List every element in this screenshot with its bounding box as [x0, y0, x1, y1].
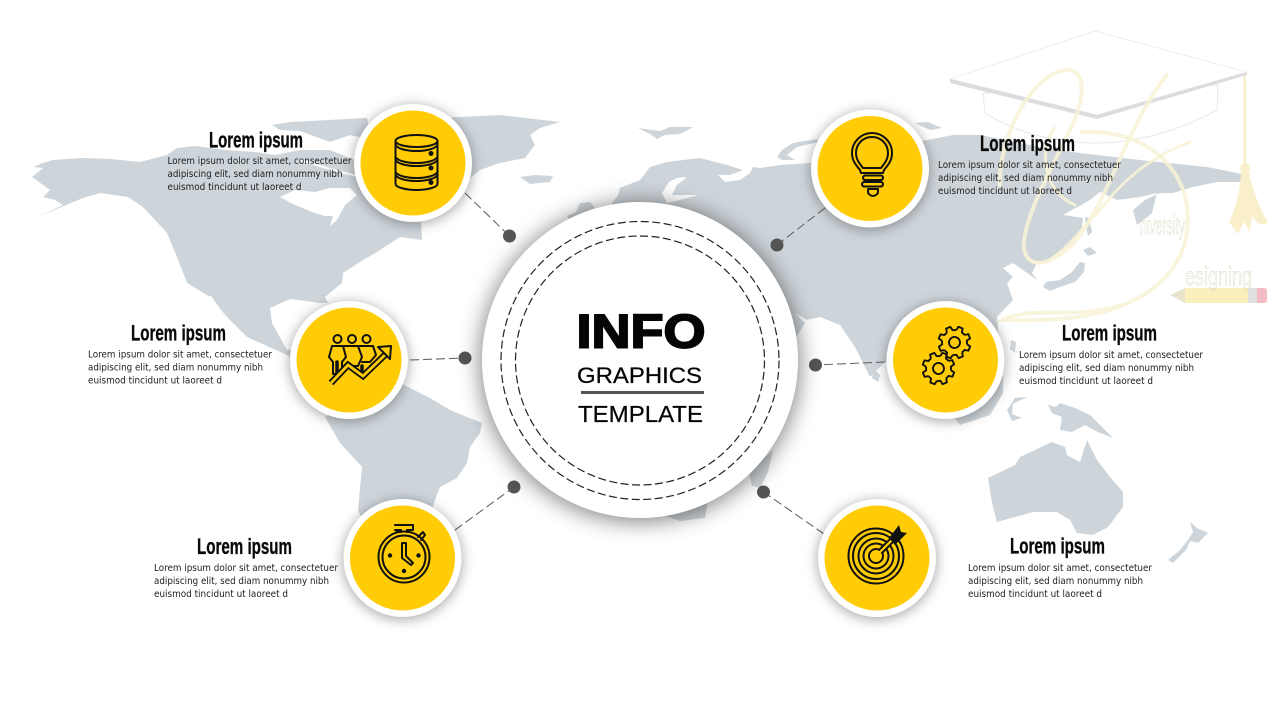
- title: GRAPHICS: GRAPHICS: [577, 363, 702, 388]
- Greenland: [400, 115, 560, 182]
- label: stopwatch: [154, 534, 338, 600]
- central badge: [480, 202, 800, 522]
- connector: target: [757, 486, 824, 534]
- Svalbard: [638, 127, 693, 139]
- Novaya Zemlya: [777, 139, 818, 160]
- South America: [325, 383, 482, 560]
- Hudson Bay: [280, 188, 357, 226]
- label: database: Lorem ipsum: [209, 128, 303, 152]
- title rule: [581, 391, 704, 394]
- connector: gears: [809, 358, 885, 372]
- cap edge: [950, 72, 1247, 119]
- label: light bulb: Lorem ipsum dolor sit amet, consectetuer: [938, 160, 1121, 171]
- icon: target with arrow: [848, 525, 907, 584]
- Sri Lanka: [872, 368, 880, 382]
- Taiwan: [1010, 340, 1016, 353]
- node: stopwatch: [342, 499, 462, 620]
- label: stopwatch: adipiscing elit, sed diam nonummy nibh: [154, 576, 329, 587]
- cap base: [983, 85, 1218, 143]
- label: people growth: euismod tincidunt ut laoreet d: [88, 376, 222, 386]
- label: people growth: Lorem ipsum dolor sit amet, consectetuer: [88, 350, 272, 360]
- label: people growth: Lorem ipsum: [131, 320, 226, 346]
- label: database: Lorem ipsum dolor sit amet, consectetuer: [168, 156, 352, 167]
- Severnaya Zemlya: [915, 122, 942, 130]
- label: target: [968, 534, 1152, 600]
- connector: database: [465, 193, 516, 242]
- tassel: [1229, 76, 1268, 234]
- node: people growth: [289, 301, 409, 422]
- label: light bulb: Lorem ipsum: [980, 131, 1075, 156]
- label: gears: [1019, 320, 1203, 387]
- connector: bulb: [770, 208, 825, 252]
- node: database: [353, 104, 473, 225]
- node: target: [817, 499, 937, 620]
- watermark words: niversity: [1140, 210, 1185, 240]
- Arctic channels: [270, 140, 358, 176]
- label: people growth: adipiscing elit, sed diam nonummy nibh: [88, 362, 263, 374]
- watermark words: esigning: [1185, 261, 1252, 291]
- label: database: adipiscing elit, sed diam nonummy nibh: [168, 169, 342, 180]
- icon: people with rising arrow: [329, 335, 391, 383]
- watermark words: [1140, 210, 1252, 291]
- pencil: [1170, 288, 1267, 303]
- icon: gears: [918, 322, 975, 389]
- label: gears: adipiscing elit, sed diam nonummy nibh: [1019, 363, 1194, 374]
- signature strokes: [1000, 70, 1190, 320]
- UK: [567, 202, 595, 220]
- Hokkaido: [1083, 247, 1097, 256]
- Africa tip: [660, 500, 708, 521]
- label: gears: euismod tincidunt ut laoreet d: [1019, 376, 1153, 387]
- Baja channel: [210, 296, 227, 321]
- label: stopwatch: Lorem ipsum dolor sit amet, consectetuer: [154, 563, 338, 574]
- node: light bulb: [810, 110, 930, 230]
- cap top: [950, 31, 1247, 115]
- North America: [32, 146, 422, 400]
- label: database: [168, 128, 352, 193]
- New Zealand: [1168, 522, 1208, 563]
- label: gears: Lorem ipsum: [1062, 320, 1157, 346]
- Japan: [1043, 262, 1085, 291]
- title: TEMPLATE: TEMPLATE: [578, 401, 703, 427]
- Eurasia: [600, 135, 1247, 425]
- Arctic islands: [272, 118, 372, 142]
- Sakhalin: [1085, 217, 1092, 236]
- icon: database: [396, 135, 438, 190]
- Australia: [988, 440, 1123, 535]
- Iceland: [520, 175, 553, 184]
- connector: people: [410, 352, 472, 364]
- label: target: Lorem ipsum: [1010, 534, 1105, 558]
- icon: light bulb: [852, 133, 892, 196]
- label: target: euismod tincidunt ut laoreet d: [968, 589, 1102, 600]
- Madagascar: [749, 450, 773, 488]
- label: stopwatch: euismod tincidunt ut laoreet d: [154, 589, 288, 600]
- label: gears: Lorem ipsum dolor sit amet, consectetuer: [1019, 350, 1203, 361]
- node: gears: [886, 301, 1006, 422]
- New Guinea: [1048, 403, 1113, 438]
- label: target: adipiscing elit, sed diam nonummy nibh: [968, 576, 1143, 587]
- label: light bulb: adipiscing elit, sed diam nonummy nibh: [938, 173, 1113, 184]
- title: INFO: INFO: [576, 306, 706, 358]
- connector: stopwatch: [455, 480, 520, 530]
- label: stopwatch: Lorem ipsum: [197, 534, 292, 559]
- label: target: Lorem ipsum dolor sit amet, consectetuer: [968, 563, 1152, 574]
- Philippines and Indonesia: [1007, 397, 1027, 421]
- world map background: [32, 115, 1247, 563]
- label: light bulb: euismod tincidunt ut laoreet d: [938, 186, 1072, 197]
- watermark: graduation cap and signature: [950, 31, 1268, 320]
- Baltic: [662, 177, 698, 203]
- label: light bulb: [938, 131, 1121, 197]
- label: people growth: [88, 320, 272, 386]
- label: database: euismod tincidunt ut laoreet d: [168, 182, 302, 193]
- icon: stopwatch: [378, 525, 430, 582]
